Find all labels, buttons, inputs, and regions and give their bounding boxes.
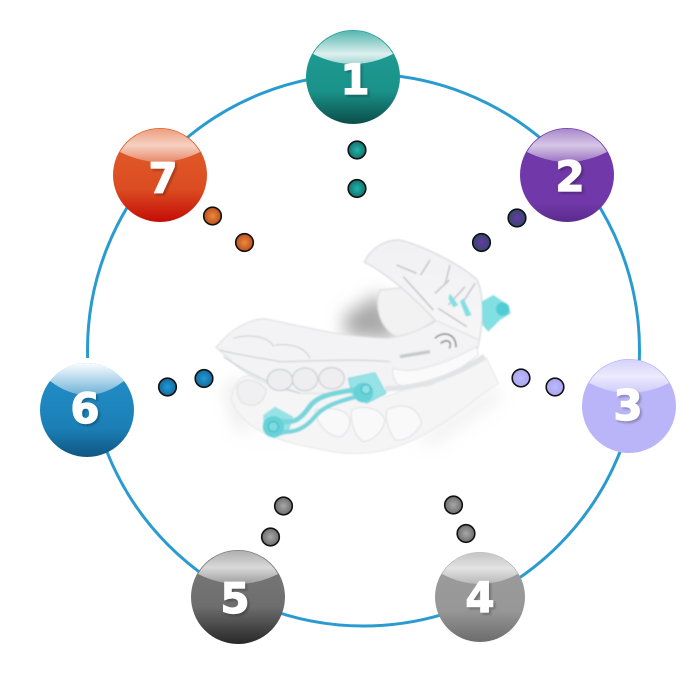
numbered ball 7 <box>113 128 207 222</box>
numbered ball 3 <box>582 359 676 453</box>
connector dots: ball 1 <box>348 141 366 197</box>
numbered ball 1 <box>306 30 400 124</box>
numbered ball 4 <box>435 552 525 642</box>
front upper tray <box>216 319 479 393</box>
numbered ball 4: 4 <box>465 573 495 622</box>
engraved text <box>400 352 430 357</box>
tray seam <box>385 354 486 391</box>
numbered ball 2 <box>520 128 614 222</box>
photo group <box>216 240 511 454</box>
appliance shadow <box>227 293 500 447</box>
mouthguard appliance photo <box>216 240 511 454</box>
numbered ball 6 <box>40 363 134 457</box>
connecting ring <box>88 74 640 626</box>
numbered ball 1: 1 <box>340 55 370 104</box>
connector dots: ball 4 <box>445 496 475 542</box>
upper tray ridges and teeth <box>220 336 478 393</box>
lower tray teeth <box>237 380 422 442</box>
numbered ball 6: 6 <box>70 384 100 433</box>
numbered ball 2: 2 <box>555 152 585 201</box>
numbered ball 5 <box>191 550 285 644</box>
connector dots: ball 3 <box>512 369 564 396</box>
connector dots: ball 6 <box>159 370 213 396</box>
connector dots: ball 5 <box>262 497 292 546</box>
numbered ball 7: 7 <box>148 154 178 203</box>
back upper tray <box>364 240 483 385</box>
tray tooth ridges <box>397 260 475 327</box>
back lower tray <box>378 287 440 337</box>
connector dots: ball 7 <box>204 207 253 251</box>
engraved logo swirl <box>435 334 456 348</box>
teal side connector arm <box>263 373 386 438</box>
back teal fittings <box>448 293 511 332</box>
lower tray <box>232 358 498 454</box>
numbered ball 3: 3 <box>613 381 643 430</box>
connector dots: ball 2 <box>473 209 526 251</box>
numbered ball 5: 5 <box>220 574 250 623</box>
